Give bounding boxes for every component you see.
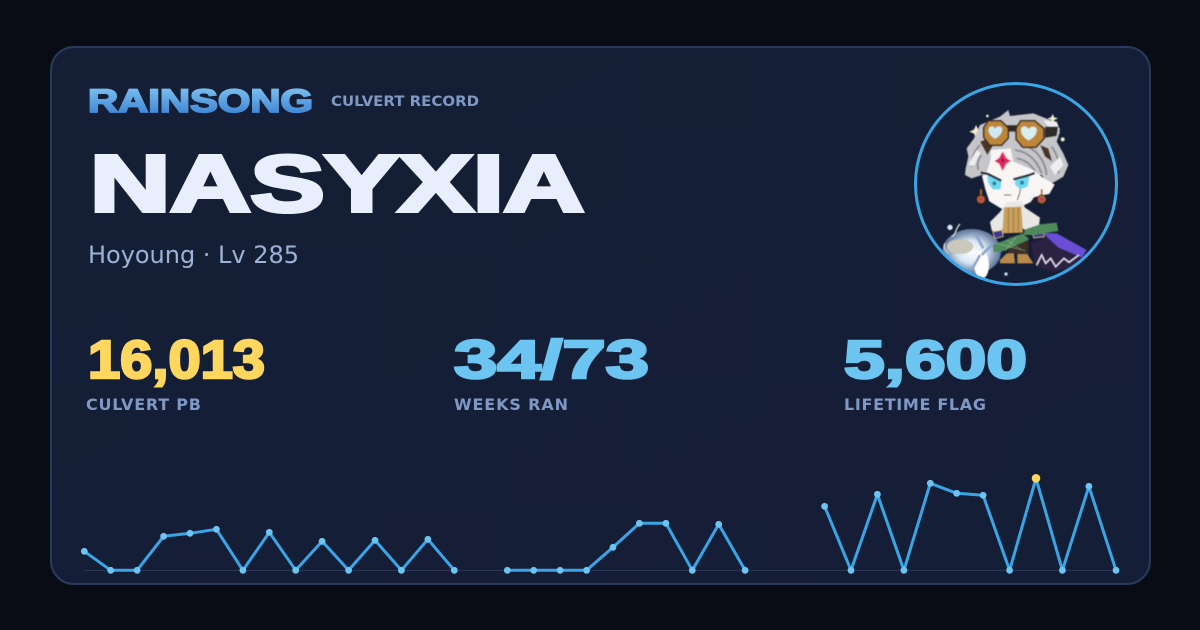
icon: body and vest bbox=[990, 201, 1044, 263]
stat: culvert PB: 16,013 bbox=[88, 330, 265, 390]
icon: hair bbox=[965, 110, 1068, 185]
icon: purple blade bbox=[1031, 233, 1087, 272]
character class and level: Hoyoung · Lv 285 bbox=[88, 241, 299, 269]
panel: card bbox=[51, 47, 1150, 584]
icon: green scarf bbox=[993, 223, 1058, 252]
icon: face bbox=[982, 148, 1055, 209]
stat: weeks ran: 34/73 bbox=[454, 330, 649, 390]
subtitle: CULVERT RECORD: CULVERT RECORD bbox=[331, 94, 479, 110]
icon: forehead gem bbox=[994, 151, 1011, 171]
stat label: CULVERT PB bbox=[86, 395, 201, 414]
stat: culvert PB bbox=[86, 330, 265, 414]
title: character name: NASYXIA bbox=[90, 139, 584, 228]
avatar: character portrait bbox=[916, 84, 1116, 284]
line chart: weekly scores bbox=[81, 474, 1119, 574]
brand logo: RAINSONG: RAINSONG bbox=[88, 83, 313, 119]
avatar ring bbox=[916, 84, 1116, 284]
icon: left light flare bbox=[942, 224, 1008, 279]
peak marker bbox=[1032, 474, 1040, 483]
stat: lifetime flag bbox=[844, 330, 1027, 414]
stat label: WEEKS RAN bbox=[454, 395, 568, 414]
stat label: LIFETIME FLAG bbox=[844, 395, 986, 414]
icon: sparkles bbox=[969, 114, 1065, 141]
stat: lifetime flag: 5,600 bbox=[844, 330, 1027, 390]
stat: weeks ran bbox=[454, 330, 649, 414]
icon: eyes bbox=[981, 173, 1035, 195]
icon: goggles bbox=[980, 121, 1058, 162]
icon: earrings bbox=[977, 189, 1046, 204]
